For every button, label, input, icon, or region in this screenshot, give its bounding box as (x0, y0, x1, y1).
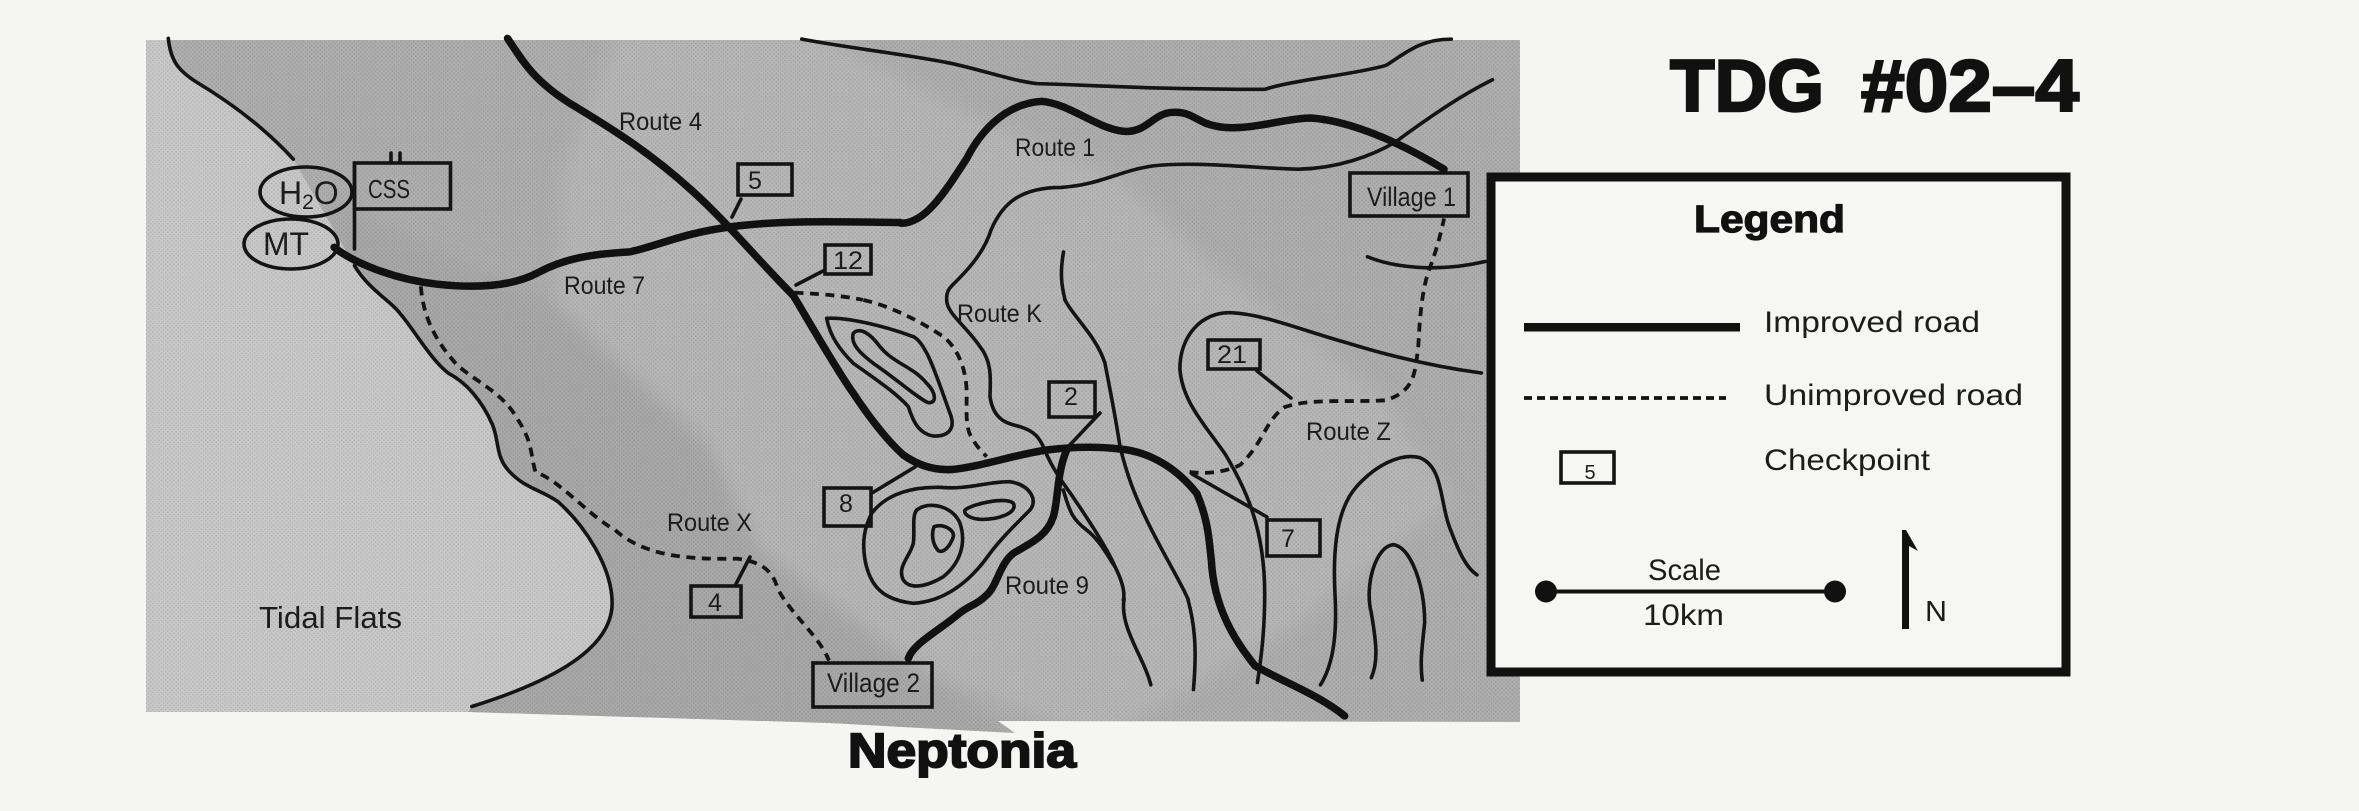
village 1 (1350, 173, 1468, 216)
panel: terrain map (130, 20, 1530, 755)
scale bar (1535, 554, 1846, 632)
water point (260, 167, 352, 217)
checkpoint 7 (1192, 474, 1320, 556)
title: #02–4 (1861, 46, 2079, 127)
checkpoint 4: 4 (708, 589, 722, 617)
village 2: Village 2 (827, 668, 920, 698)
label: Route 1: Route 1 (1015, 134, 1095, 162)
title: TDG (1670, 46, 1824, 127)
scale bar: 10km (1643, 599, 1724, 632)
legend item: unimproved road: Unimproved road (1764, 379, 2023, 412)
label: Tidal Flats: Tidal Flats (259, 600, 402, 635)
maintenance point (244, 219, 338, 269)
legend item: improved road (1524, 306, 1980, 339)
improved roads (334, 38, 1444, 716)
water point: O (314, 175, 339, 211)
label: Route 7: Route 7 (564, 272, 645, 300)
legend item: checkpoint (1561, 444, 1931, 484)
checkpoint 8: 8 (839, 490, 853, 518)
CSS and supply symbols (244, 153, 450, 269)
water point: H (279, 175, 302, 211)
village 2 (813, 663, 932, 707)
label: Route X: Route X (667, 509, 752, 537)
checkpoint 4 (691, 557, 750, 617)
unimproved roads (421, 218, 1444, 661)
label: Route 4: Route 4 (619, 108, 702, 136)
terrain shading (130, 20, 1530, 755)
checkpoint 5: 5 (748, 167, 762, 195)
maintenance point: MT (263, 226, 309, 262)
checkpoint 2 (1049, 382, 1100, 447)
checkpoint 21 (1208, 340, 1291, 398)
legend item: checkpoint: Checkpoint (1764, 444, 1931, 477)
label: Route Z: Route Z (1306, 418, 1391, 446)
legend item: improved road: Improved road (1764, 306, 1980, 339)
checkpoint 21: 21 (1217, 341, 1247, 369)
legend item: checkpoint: 5 (1584, 462, 1596, 484)
CSS unit flag: CSS (368, 174, 410, 204)
CSS unit flag (354, 153, 450, 249)
checkpoint 12: 12 (833, 247, 863, 275)
legend heading: Legend (1694, 199, 1845, 241)
label: Route K: Route K (957, 300, 1042, 328)
scale bar: Scale (1648, 554, 1721, 587)
panel: legend (1491, 177, 2066, 672)
north arrow (1902, 530, 1947, 629)
title (1670, 46, 2079, 127)
checkpoint 12 (796, 245, 871, 285)
checkpoint 2: 2 (1064, 383, 1078, 411)
north arrow: N (1925, 596, 1947, 628)
checkpoint 5 (732, 164, 792, 217)
checkpoint 7: 7 (1281, 525, 1295, 553)
checkpoint 8 (824, 467, 915, 526)
infographic canvas (146, 34, 2080, 778)
map title: Neptonia: Neptonia (848, 725, 1076, 778)
water point: 2 (302, 191, 314, 214)
label: Route 9: Route 9 (1005, 572, 1089, 600)
village 1: Village 1 (1367, 182, 1456, 212)
terrain contour lines and rivers (168, 38, 1493, 707)
